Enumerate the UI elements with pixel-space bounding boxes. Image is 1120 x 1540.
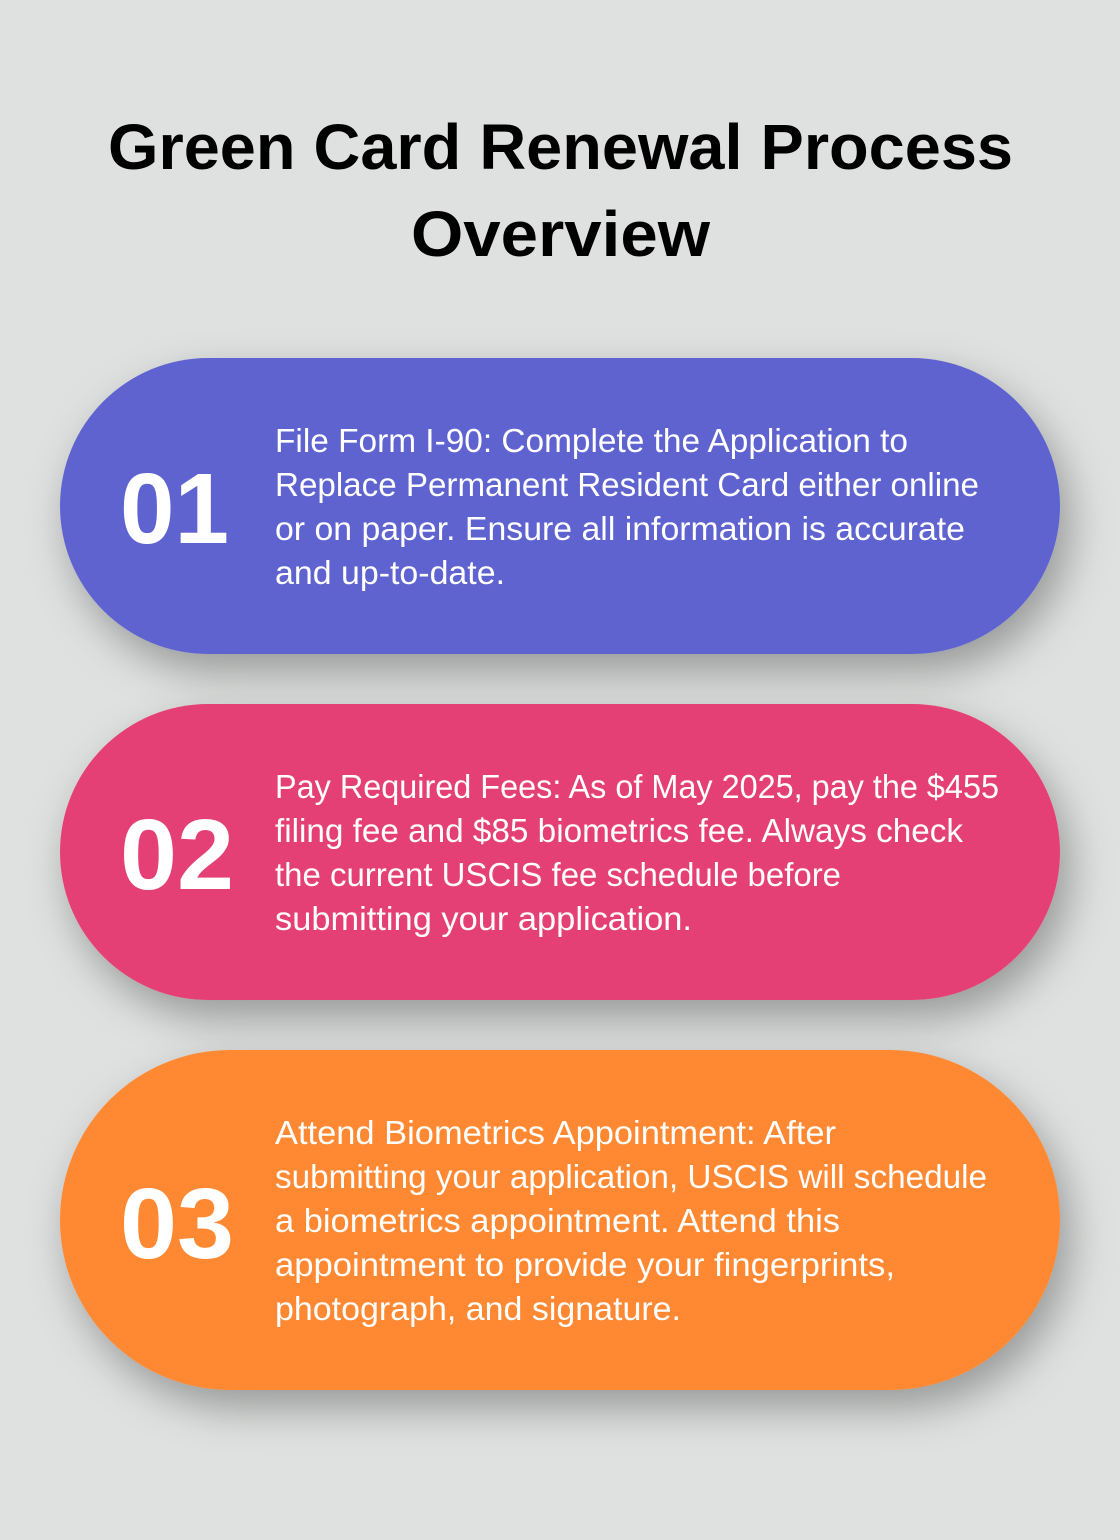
text block: step 01 description (275, 422, 979, 591)
pill background: step 02 (60, 704, 1060, 1000)
text block: step 01 description: File Form I-90: Complete the Application to (275, 422, 908, 459)
text block: step 03 description: Attend Biometrics Appointment: After (275, 1114, 836, 1151)
text block: step 01 description: Replace Permanent Resident Card either online (275, 466, 979, 503)
text block: step 03 description: appointment to provide your fingerprints, (275, 1246, 895, 1283)
text block: step 03 description: photograph, and signature. (275, 1290, 681, 1327)
pill background: step 01 (60, 358, 1060, 654)
text block: step 03 description (275, 1114, 987, 1327)
title: Green Card Renewal Process (108, 111, 1013, 183)
number: 02: 02 (120, 799, 234, 911)
text block: step 02 description: filing fee and $85 biometrics fee. Always check (275, 812, 963, 849)
number: 03: 03 (120, 1168, 234, 1280)
panel: step 03 (60, 1050, 1060, 1390)
title (108, 111, 1013, 270)
text block: step 03 description: a biometrics appointment. Attend this (275, 1202, 840, 1239)
text block: step 02 description (275, 768, 999, 937)
pill background: step 03 (60, 1050, 1060, 1390)
panel: step 01 (60, 358, 1060, 654)
text block: step 01 description: or on paper. Ensure all information is accurate (275, 510, 965, 547)
text block: step 02 description: Pay Required Fees: As of May 2025, pay the $455 (275, 768, 999, 805)
number: 01: 01 (120, 453, 229, 565)
text block: step 03 description: submitting your application, USCIS will schedule (275, 1158, 987, 1195)
title: Overview (411, 198, 710, 270)
panel: step 02 (60, 704, 1060, 1000)
text block: step 02 description: submitting your application. (275, 900, 692, 937)
text block: step 02 description: the current USCIS fee schedule before (275, 856, 841, 893)
text block: step 01 description: and up-to-date. (275, 554, 505, 591)
